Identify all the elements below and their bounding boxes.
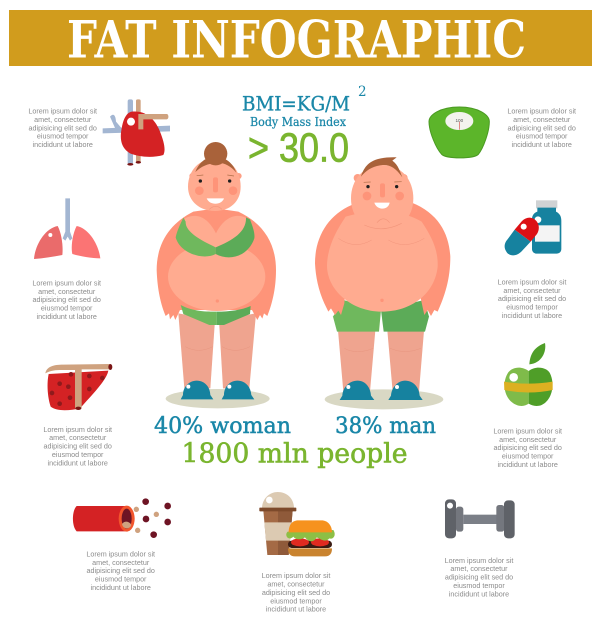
icon: dumbbell xyxy=(445,499,515,538)
text block: apple: eiusmod tempor xyxy=(502,452,554,461)
text block: lungs: eiusmod tempor xyxy=(41,304,93,313)
text block: liver: incididunt ut labore xyxy=(48,458,108,467)
text block: heart: eiusmod tempor xyxy=(37,132,89,141)
text block: dumbbell: Lorem ipsum dolor sit xyxy=(445,556,513,565)
text block: lungs: adipisicing elit sed do xyxy=(33,295,101,304)
hair xyxy=(361,157,402,177)
face xyxy=(197,174,234,177)
head xyxy=(189,173,195,179)
text block: liver: amet, consectetur xyxy=(49,433,107,442)
hair xyxy=(204,142,227,165)
icon: coffee and burger xyxy=(259,492,335,556)
BMI formula heading: Body Mass Index xyxy=(250,115,346,129)
text block: food: incididunt ut labore xyxy=(266,605,326,614)
text block: lungs: incididunt ut labore xyxy=(37,312,97,321)
text block: food: eiusmod tempor xyxy=(270,596,322,605)
shorts xyxy=(333,300,381,332)
statistic: woman percentage: 40% woman xyxy=(154,413,291,439)
statistic: total people: 1800 mln people xyxy=(182,438,408,470)
text block: pills: Lorem ipsum dolor sit xyxy=(498,278,566,286)
text block: pills: eiusmod tempor xyxy=(506,303,558,312)
text block: pills: incididunt ut labore xyxy=(502,311,562,320)
belly xyxy=(327,211,438,312)
text block: scale xyxy=(507,106,576,149)
text block: artery: adipisicing elit sed do xyxy=(87,566,155,575)
text block: dumbbell: eiusmod tempor xyxy=(453,581,505,590)
icon: clogged artery xyxy=(73,498,171,538)
BMI formula heading: BMI=KG/M xyxy=(242,92,350,116)
text block: lungs: Lorem ipsum dolor sit xyxy=(32,278,101,288)
text block: dumbbell: incididunt ut labore xyxy=(449,589,509,598)
text block: artery: incididunt ut labore xyxy=(91,583,151,592)
text block: artery: eiusmod tempor xyxy=(95,575,147,584)
text block: scale: eiusmod tempor xyxy=(516,132,568,141)
title banner xyxy=(9,10,592,70)
text block: pills: adipisicing elit sed do xyxy=(498,294,566,303)
icon: pills xyxy=(505,200,561,255)
BMI formula heading: > 30.0 xyxy=(248,124,349,170)
text block: artery xyxy=(86,550,155,592)
shoes xyxy=(340,381,374,400)
text block: liver xyxy=(43,425,112,467)
statistic: man percentage: 38% man xyxy=(335,413,436,439)
icon: lungs xyxy=(34,198,100,259)
BMI formula heading: 2 xyxy=(358,84,367,100)
text block: dumbbell: adipisicing elit sed do xyxy=(445,572,513,582)
chest xyxy=(182,216,250,253)
bikini top xyxy=(176,218,216,256)
text block: food xyxy=(262,571,330,614)
text block: scale: incididunt ut labore xyxy=(512,140,572,149)
head xyxy=(354,174,362,182)
BMI formula heading xyxy=(242,84,367,170)
text block: apple: Lorem ipsum dolor sit xyxy=(493,426,562,436)
text block: scale: Lorem ipsum dolor sit xyxy=(507,106,576,116)
bikini bottom xyxy=(181,305,217,325)
text block: liver: adipisicing elit sed do xyxy=(44,442,112,450)
text block: liver: Lorem ipsum dolor sit xyxy=(43,425,112,434)
text block: pills: amet, consectetur xyxy=(503,286,561,295)
figure: woman xyxy=(157,142,276,408)
arms and back xyxy=(157,208,276,320)
belly xyxy=(168,242,265,311)
text block: heart: adipisicing elit sed do xyxy=(29,123,97,132)
icon: weight scale: 100 xyxy=(455,118,464,123)
icon: heart xyxy=(103,99,170,166)
figure: man xyxy=(315,157,450,409)
legs xyxy=(178,313,215,388)
arms and back xyxy=(315,203,450,316)
text block: food: adipisicing elit sed do xyxy=(262,588,330,597)
text block: liver: eiusmod tempor xyxy=(52,450,104,459)
text block: heart: incididunt ut labore xyxy=(33,140,93,149)
text block: heart: amet, consectetur xyxy=(34,115,92,124)
icon: apple with tape xyxy=(504,343,553,406)
text block: apple xyxy=(493,426,562,469)
icon: weight scale xyxy=(429,107,489,158)
text block: artery: Lorem ipsum dolor sit xyxy=(86,550,155,558)
text block: scale: adipisicing elit sed do xyxy=(508,123,576,132)
face xyxy=(364,181,402,183)
text block: apple: adipisicing elit sed do xyxy=(494,443,562,452)
text block: dumbbell: amet, consectetur xyxy=(450,564,508,573)
shoes xyxy=(181,381,213,399)
text block: apple: incididunt ut labore xyxy=(498,460,558,469)
text block: food: Lorem ipsum dolor sit xyxy=(262,571,330,580)
text block: pills xyxy=(498,278,566,320)
legs xyxy=(338,327,376,392)
text block: food: amet, consectetur xyxy=(267,580,325,589)
text block: heart: Lorem ipsum dolor sit xyxy=(28,106,97,116)
icon: liver xyxy=(45,364,112,410)
text block: dumbbell xyxy=(445,556,513,598)
text block: lungs xyxy=(32,278,101,321)
text block: apple: amet, consectetur xyxy=(499,435,557,444)
text block: artery: amet, consectetur xyxy=(92,558,150,567)
text block: scale: amet, consectetur xyxy=(513,115,571,124)
text block: lungs: amet, consectetur xyxy=(38,287,96,296)
text block: heart xyxy=(28,106,97,149)
